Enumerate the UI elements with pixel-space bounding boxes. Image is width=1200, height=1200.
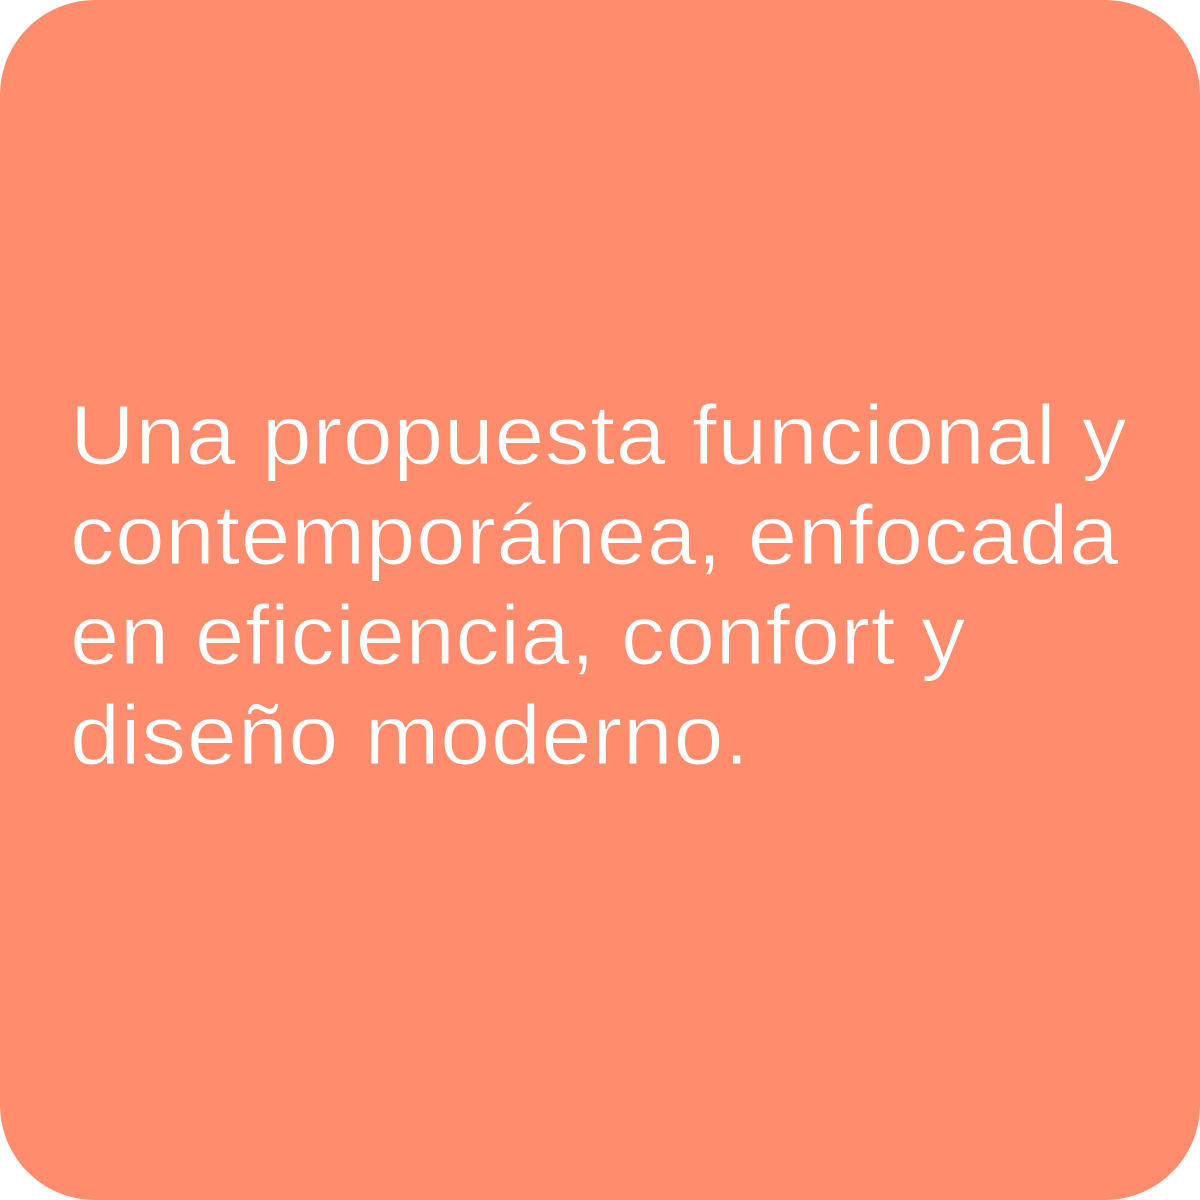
text block: description: Una propuesta funcional y xyxy=(70,388,1127,482)
text block: description: contemporánea, enfocada xyxy=(70,488,1119,582)
text block: description: diseño moderno. xyxy=(70,688,749,782)
text block: description xyxy=(70,388,1127,782)
text block: description: en eficiencia, confort y xyxy=(70,588,966,682)
